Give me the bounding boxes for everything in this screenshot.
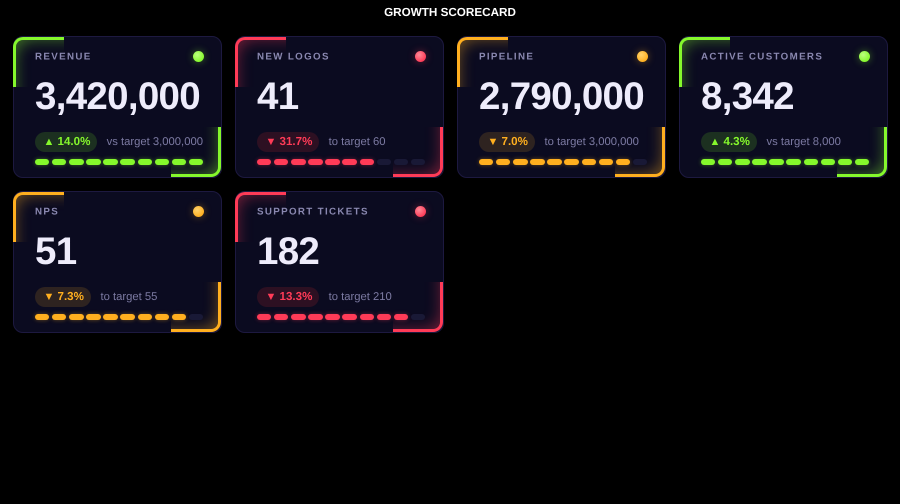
status dot (415, 206, 426, 217)
status dot (859, 51, 870, 62)
delta pill: 13.3% (280, 290, 312, 303)
label: REVENUE (35, 52, 92, 62)
status dot (637, 51, 648, 62)
target text: to target 60 (329, 136, 386, 148)
value: 51 (35, 230, 76, 273)
panel: active customers (679, 36, 888, 178)
status dot (193, 206, 204, 217)
delta pill: 14.0% (58, 135, 90, 148)
delta pill (35, 287, 91, 306)
title: GROWTH SCORECARD (384, 6, 516, 18)
delta pill: ▼ (266, 291, 276, 303)
delta pill: 31.7% (280, 135, 312, 148)
label: NPS (35, 206, 59, 218)
target text: vs target 3,000,000 (107, 136, 203, 148)
progress segments (255, 156, 425, 168)
label: ACTIVE CUSTOMERS (701, 52, 823, 62)
progress segments (255, 312, 425, 322)
panel: new logos (235, 36, 444, 178)
panel: pipeline (457, 36, 666, 178)
delta pill (257, 287, 319, 306)
delta pill: 7.3% (58, 290, 84, 303)
progress segments (699, 156, 871, 168)
value: 3,420,000 (35, 75, 200, 118)
progress segments (477, 156, 647, 168)
value: 182 (257, 230, 319, 273)
value: 2,790,000 (479, 75, 644, 118)
delta pill: ▼ (488, 136, 498, 148)
status dot (193, 51, 204, 62)
progress segments (33, 156, 205, 168)
delta pill: 7.0% (502, 135, 528, 148)
delta pill (35, 132, 97, 152)
target text: vs target 8,000 (766, 136, 841, 148)
panel: support tickets (235, 191, 444, 333)
label: SUPPORT TICKETS (257, 206, 369, 218)
delta pill: ▼ (266, 136, 276, 148)
delta pill (479, 132, 535, 152)
delta pill: ▼ (44, 291, 54, 303)
target text: to target 3,000,000 (544, 136, 639, 148)
delta pill (701, 132, 757, 152)
delta pill: 4.3% (724, 135, 750, 148)
delta pill: ▲ (44, 136, 54, 148)
target text: to target 210 (329, 290, 392, 302)
panel: revenue (13, 36, 222, 178)
label: NEW LOGOS (257, 52, 330, 62)
status dot (415, 51, 426, 62)
label: PIPELINE (479, 52, 534, 62)
delta pill: ▲ (710, 136, 720, 148)
panel: nps (13, 191, 222, 333)
value: 8,342 (701, 75, 794, 118)
progress segments (33, 312, 203, 322)
value: 41 (257, 75, 298, 118)
target text: to target 55 (100, 290, 157, 302)
delta pill (257, 132, 319, 152)
